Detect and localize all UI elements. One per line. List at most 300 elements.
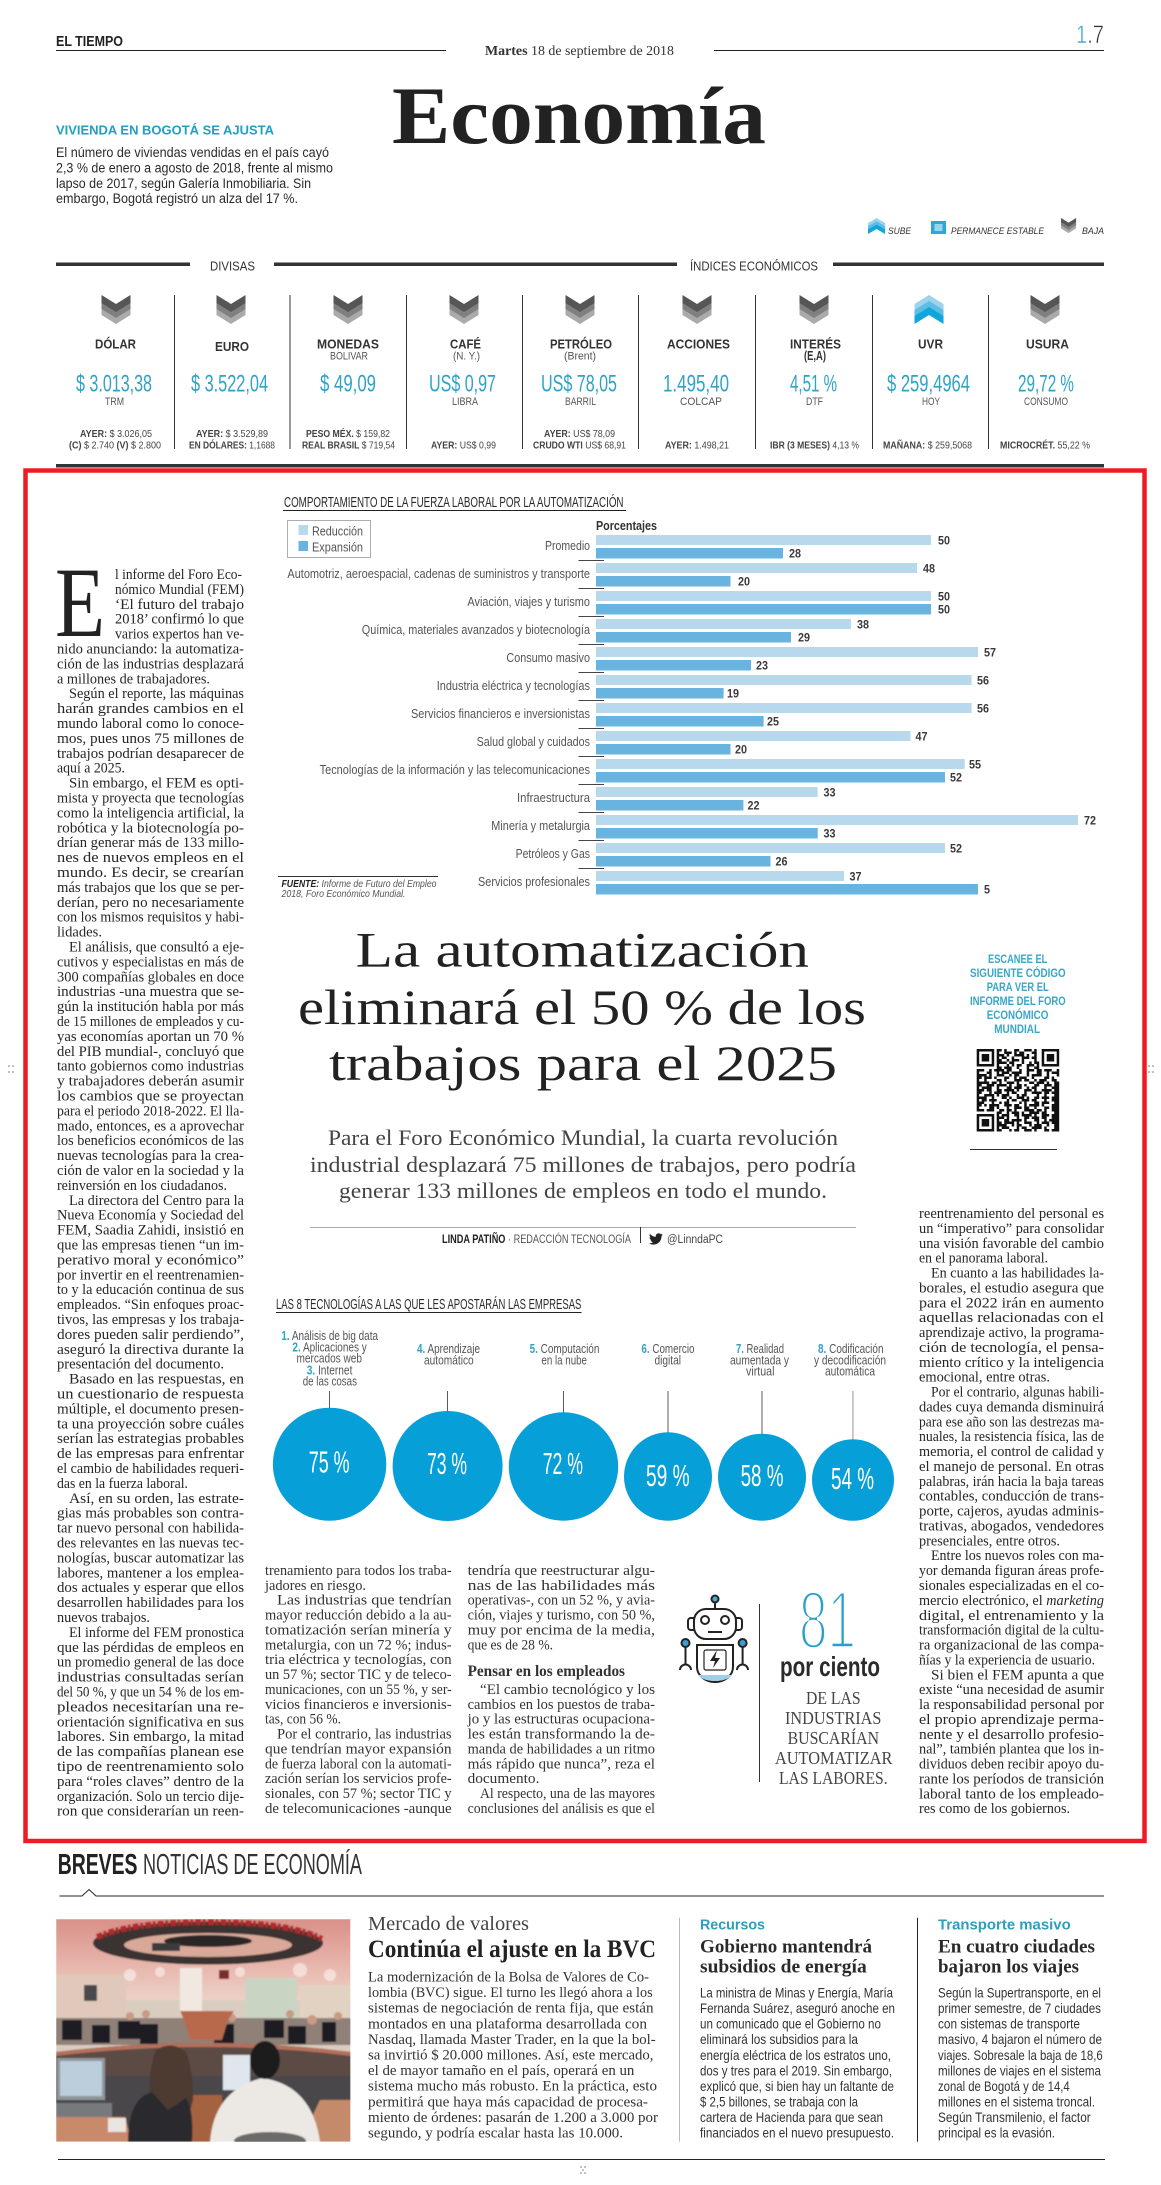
QR caption: INFORME DEL FORO <box>970 994 1066 1008</box>
bubble 75 %: 3. Internet <box>307 1362 353 1378</box>
article column right: yor demanda figuran áreas profe- <box>919 1563 1104 1579</box>
article column 2: zación serían los servicios profe- <box>265 1771 452 1787</box>
row: promedio: 28 <box>789 548 802 560</box>
article column 1: derían, pero no necesariamente <box>57 895 244 911</box>
article column 1: ron que considerarían un reen- <box>57 1804 244 1820</box>
axis unit: Porcentajes <box>596 519 657 533</box>
indicator: euro: AYER: $ 3.529,89 <box>196 428 268 440</box>
subheading: Para el Foro Económico Mundial, la cuarta revolución <box>328 1125 838 1150</box>
row: consumo masivo: 23 <box>756 660 768 672</box>
indicator: interés: IBR (3 MESES) 4,13 % <box>770 440 859 452</box>
article column right: Si bien el FEM apunta a que <box>931 1667 1104 1683</box>
article column 1: l informe del Foro Eco- <box>115 567 242 583</box>
article column right: emocional, entre otras. <box>919 1370 1050 1386</box>
brief: recursos: financiados en el nuevo presupuesto. <box>700 2125 894 2141</box>
bubble 75 %: de las cosas <box>303 1374 357 1388</box>
brief: recursos: Recursos <box>700 1916 765 1933</box>
article column right: presenciales, entre otros. <box>919 1533 1060 1549</box>
row: servicios financieros: 25 <box>767 716 780 728</box>
row: aviación <box>467 591 950 616</box>
article column 1: to y la educación continua de sus <box>57 1282 244 1298</box>
article column right: la responsabilidad personal por <box>919 1697 1104 1713</box>
article column 1: Así, en su orden, las estrate- <box>69 1491 244 1507</box>
article column 2: que tendrían mayor expansión <box>265 1741 452 1757</box>
article column right: laboral tanto de los empleado- <box>919 1786 1104 1802</box>
row: promedio: Promedio <box>545 538 590 553</box>
article column 1: de las compañías planean ese <box>57 1744 244 1760</box>
article column 3: Al respecto, una de las mayores <box>480 1786 655 1802</box>
article column 1: de las empresas para enfrentar <box>57 1446 244 1462</box>
chart title: COMPORTAMIENTO DE LA FUERZA LABORAL POR LA AUTOMATIZACIÓN <box>284 494 624 511</box>
bubble 58 %: aumentada y <box>730 1352 789 1368</box>
article column 3: cambios en los puestos de traba- <box>468 1697 655 1713</box>
bubble 72 %: 72 % <box>543 1446 583 1481</box>
article column 2: tomatización serían minería y <box>265 1622 452 1638</box>
icon: permanece estable <box>931 221 946 234</box>
chart source <box>278 876 438 900</box>
brief: transporte masivo: millones en el sistema troncal. <box>938 2094 1095 2110</box>
row: minería: 33 <box>824 828 836 840</box>
article column 1: Basado en las respuestas, en <box>69 1372 245 1388</box>
headline <box>298 922 866 1091</box>
indicator: interés: INTERÉS <box>790 336 841 352</box>
indicator: dólar: (C) $ 2.740 (V) $ 2.800 <box>69 440 161 452</box>
article column 1: que las empresas tienen “un im- <box>57 1238 244 1254</box>
article column 1: El análisis, que consultó a eje- <box>69 940 244 956</box>
brief: mercado de valores: miento de órdenes: pasarán de 1.200 a 3.000 por <box>368 2110 658 2126</box>
indicator: euro: EURO <box>215 339 249 354</box>
article column 1: nido anunciando: la automatiza- <box>57 642 244 658</box>
article column 1: tipo de reentrenamiento solo <box>57 1759 244 1775</box>
callout text: DE LAS <box>806 1688 861 1708</box>
article column 2: un 57 %; sector TIC y de teleco- <box>265 1667 452 1683</box>
article column 1 <box>55 547 245 1820</box>
indicator: euro <box>189 295 275 452</box>
desk and papers <box>185 2095 222 2142</box>
article column 2: Por el contrario, las industrias <box>277 1727 452 1743</box>
date: Martes 18 de septiembre de 2018 <box>485 44 674 59</box>
brief: transporte masivo: principal es la evasión. <box>938 2125 1055 2141</box>
brief: recursos: La ministra de Minas y Energía, María <box>700 1984 893 2000</box>
QR callout <box>970 952 1066 1150</box>
article column 1: serían las estrategias probables <box>57 1431 244 1447</box>
article column right: Por el contrario, algunas habili- <box>931 1385 1104 1401</box>
article column right: en el panorama laboral. <box>919 1251 1048 1267</box>
article column 1: empleados. “Sin enfoques proac- <box>57 1297 244 1313</box>
bubble 59 %: 59 % <box>646 1458 690 1493</box>
newspaper name: EL TIEMPO <box>56 33 123 50</box>
brief text <box>56 145 333 206</box>
bubble 54 %: automática <box>825 1364 876 1378</box>
indicator: petróleo: PETRÓLEO <box>550 336 612 352</box>
page number: 1.7 <box>1076 21 1104 49</box>
article column 1: para “roles claves” dentro de la <box>57 1774 244 1790</box>
bubble 58 %: virtual <box>746 1364 775 1378</box>
legend label baja: BAJA <box>1082 226 1104 236</box>
row: infraestructura <box>517 787 836 812</box>
bubble 75 %: 2. Aplicaciones y <box>292 1340 367 1354</box>
row: salud <box>477 731 928 756</box>
article column 1: nes de nuevos empleos en el <box>57 850 244 866</box>
row: química <box>362 619 870 644</box>
callout text: AUTOMATIZAR <box>775 1748 892 1768</box>
brief: recursos: explicó que, si bien hay un faltante de <box>700 2078 894 2094</box>
article column 3: manda de habilidades a un ritmo <box>468 1741 655 1757</box>
article column 3: operativas-, con un 52 %, y avia- <box>468 1593 655 1609</box>
brief: recursos: Gobierno mantendrá <box>700 1937 872 1958</box>
bubble 58 % <box>718 1341 806 1521</box>
headline: La automatización <box>356 922 809 978</box>
brief: transporte masivo <box>938 1916 1103 2141</box>
red highlight frame <box>26 470 1144 1841</box>
headline: eliminará el 50 % de los <box>298 979 866 1035</box>
row: petróleos: Petróleos y Gas <box>516 846 590 861</box>
article column 1: un cuestionario de respuesta <box>57 1386 244 1402</box>
subheading: pensar en los empleados: Pensar en los empleados <box>468 1663 625 1680</box>
brief: mercado de valores: La modernización de la Bolsa de Valores de Co- <box>368 1970 649 1986</box>
article column 1: ción de las industrias desplazará <box>57 656 244 672</box>
masthead <box>56 21 1104 59</box>
bubble 73 %: 73 % <box>427 1446 467 1481</box>
brief text: 2,3 % de enero a agosto de 2018, frente al mismo <box>56 160 333 176</box>
article column 3: conclusiones del análisis es que el <box>468 1801 655 1817</box>
brief: recursos <box>700 1916 895 2141</box>
bubble 73 %: 4. Aprendizaje <box>417 1341 480 1356</box>
brief: transporte masivo: Según Transmilenio, el factor <box>938 2109 1091 2125</box>
row: servicios profesionales: 37 <box>850 872 862 884</box>
row: tecnologías: Tecnologías de la información y las telecomunicaciones <box>320 762 590 777</box>
article column right: contables, conducción de trans- <box>919 1489 1104 1505</box>
article column right: aquellas relacionadas con el <box>919 1310 1104 1326</box>
ceiling ring <box>93 1922 323 1964</box>
brief: mercado de valores: montados en una plataforma desarrollada con <box>368 2016 648 2032</box>
article column 1: como la inteligencia artificial, la <box>57 805 244 821</box>
article column 1: ‘El futuro del trabajo <box>115 597 244 613</box>
heading: divisas: DIVISAS <box>210 258 255 274</box>
indicator: uvr: HOY <box>922 396 940 408</box>
article column 1: cutivos y especialistas en más de <box>57 954 244 970</box>
subheading <box>310 1125 856 1203</box>
breves header: NOTICIAS DE ECONOMÍA <box>143 1848 362 1881</box>
article column 1: gún la institución habla por más <box>57 999 244 1015</box>
callout text <box>775 1688 892 1788</box>
article column 1: Sin embargo, el FEM es opti- <box>69 776 244 792</box>
article column 2 <box>264 1563 452 1817</box>
bubble 54 %: 8. Codificación <box>818 1341 884 1356</box>
article column 3 <box>467 1563 655 1817</box>
chart legend <box>288 520 370 558</box>
row: promedio <box>545 535 950 560</box>
indicator: petróleo: BARRIL <box>565 396 596 408</box>
row: industria eléctrica: Industria eléctrica y tecnologías <box>437 678 590 693</box>
article column right: rante los períodos de transición <box>919 1771 1104 1787</box>
por ciento: por ciento <box>780 1651 880 1682</box>
row: consumo masivo: Consumo masivo <box>506 650 590 665</box>
brief: mercado de valores: Continúa el ajuste en la BVC <box>368 1936 656 1963</box>
row: consumo masivo: 57 <box>984 648 996 660</box>
callout text: BUSCARÍAN <box>788 1727 879 1748</box>
row: automotriz: 20 <box>738 576 750 588</box>
article column 1: robótica y la biotecnología po- <box>57 820 244 836</box>
row: aviación: 50 <box>938 604 950 616</box>
article column 2: mayor reducción debido a la au- <box>265 1608 452 1624</box>
row: infraestructura: 22 <box>748 800 760 812</box>
article column 1: más trabajos que los que se per- <box>57 880 244 896</box>
subheading: generar 133 millones de empleos en todo el mundo. <box>339 1178 827 1203</box>
bubble 73 %: automático <box>424 1352 474 1368</box>
brief text: embargo, Bogotá registró un alza del 17 %. <box>56 191 298 206</box>
article column 2: Las industrias que tendrían <box>277 1593 452 1609</box>
podium <box>180 2011 234 2040</box>
article column 1: desarrollen habilidades para los <box>57 1595 244 1611</box>
brief: transporte masivo: primer semestre, de 7 ciudades <box>938 2000 1101 2016</box>
indicator: uvr <box>883 295 972 452</box>
indicator: petróleo: (Brent) <box>564 350 596 362</box>
article column right: digital, el entrenamiento y la <box>919 1608 1104 1624</box>
row: minería: 72 <box>1084 816 1096 828</box>
article column right: una visión favorable del cambio <box>919 1236 1104 1252</box>
brief: transporte masivo: Transporte masivo <box>938 1916 1071 1933</box>
bubble 75 %: 1. Análisis de big data <box>281 1328 379 1343</box>
woman seated <box>150 2045 193 2118</box>
row: promedio: 50 <box>938 536 950 548</box>
row: petróleos: 52 <box>950 844 962 856</box>
icon: sube <box>868 218 885 234</box>
indicator: monedas: PESO MÉX. $ 159,82 <box>306 427 390 440</box>
article column 1: das en la fuerza laboral. <box>57 1476 188 1492</box>
foreground monitor and keyboard <box>57 2058 105 2100</box>
row: industria eléctrica <box>437 675 989 700</box>
row: infraestructura: 33 <box>824 788 836 800</box>
article column 1: con los mismos requisitos y habi- <box>57 910 244 926</box>
row: servicios profesionales: 5 <box>984 884 991 896</box>
byline <box>310 1227 856 1246</box>
breves header <box>58 1848 1104 1896</box>
bubble chart title: LAS 8 TECNOLOGÍAS A LAS QUE LES APOSTARÁN LAS EMPRESAS <box>276 1296 581 1313</box>
article column 3: tendría que reestructurar algu- <box>468 1563 655 1579</box>
article column 1: des relevantes en las nuevas tec- <box>57 1536 244 1552</box>
QR caption: MUNDIAL <box>994 1022 1040 1036</box>
indicator: petróleo <box>533 295 626 452</box>
indicator: interés: 4,51 % <box>790 371 837 398</box>
indicator: acciones: COLCAP <box>680 396 722 408</box>
row: infraestructura: Infraestructura <box>517 790 591 805</box>
row: servicios profesionales: Servicios profesionales <box>478 874 590 889</box>
article column 1: del PIB mundial-, concluyó que <box>57 1044 244 1060</box>
row: minería <box>491 815 1096 840</box>
article column 2: trenamiento para todos los traba- <box>265 1563 452 1579</box>
article column 1: El informe del FEM pronostica <box>69 1625 244 1641</box>
article column right: transformación digital de la cultu- <box>919 1623 1104 1639</box>
indicator: acciones <box>663 295 730 452</box>
article column right: existe “una necesidad de asumir <box>919 1682 1104 1698</box>
article column right: nuales, la resistencia física, las de <box>919 1429 1104 1445</box>
row: automotriz <box>287 563 936 588</box>
indicator: acciones: ACCIONES <box>667 336 730 352</box>
section title: Economía <box>392 70 766 161</box>
row: tecnologías: 55 <box>969 760 982 772</box>
brief: recursos: cartera de Hacienda para que sean <box>700 2109 883 2125</box>
bubble 72 % <box>509 1341 618 1521</box>
big number: 81 <box>799 1575 856 1666</box>
article column 1: mundo laboral como lo conoce- <box>57 716 244 732</box>
indicator: interés: (E,A) <box>804 348 826 363</box>
brief: recursos: eliminará los subsidios para la <box>700 2031 858 2047</box>
article column 1: Según el reporte, las máquinas <box>69 686 244 702</box>
brief: mercado de valores: Nasdaq, llamada Master Trader, en la que la bol- <box>368 2032 656 2048</box>
article column 1: labores, mantener a los emplea- <box>57 1565 244 1581</box>
article column right: aprendizaje activo, la programa- <box>919 1325 1104 1341</box>
article column right: el propio aprendizaje perma- <box>919 1712 1104 1728</box>
article column 1: aseguró la directiva durante la <box>57 1342 244 1358</box>
article column 1: yas economías aportan un 70 % <box>57 1029 244 1045</box>
indicator: petróleo: US$ 78,05 <box>541 371 617 398</box>
article column right: para ese año son las destrezas ma- <box>919 1414 1104 1430</box>
QR caption: PARA VER EL <box>987 980 1049 994</box>
brief: mercado de valores: el de mayor tamaño en el país, operará en un <box>368 2063 635 2079</box>
indicator: café: LIBRA <box>452 396 479 408</box>
indicator: uvr: $ 259,4964 <box>887 371 970 398</box>
chart legend: Reducción <box>312 524 363 538</box>
row: aviación: 50 <box>938 592 950 604</box>
article column right: ción de tecnología, el pensa- <box>919 1340 1104 1356</box>
brief: recursos: un comunicado que el Gobierno no <box>700 2016 881 2032</box>
article column 1: tar nuevo personal con habilida- <box>57 1521 244 1537</box>
article column right: dades cuya demanda disminuirá <box>919 1399 1104 1415</box>
article column 1: gias más probables son contra- <box>57 1506 244 1522</box>
article column 1: un promedio general de las doce <box>57 1655 244 1671</box>
row: automotriz: 48 <box>923 564 936 576</box>
laptop <box>223 2055 250 2090</box>
bubble 75 % <box>273 1328 386 1521</box>
article column 1: dos actuales y esperar que ellos <box>57 1580 244 1596</box>
article column 1: tivos, las empresas y los trabaja- <box>57 1312 244 1328</box>
article column 1: organización. Solo un tercio dije- <box>57 1789 244 1805</box>
chart source: FUENTE: Informe de Futuro del Empleo <box>282 879 437 890</box>
brief text: lapso de 2017, según Galería Inmobiliaria. Sin <box>56 176 311 191</box>
article column right: reentrenamiento del personal es <box>919 1206 1104 1222</box>
row: salud: Salud global y cuidados <box>477 734 590 749</box>
article column 1: para el periodo 2018-2022. El lla- <box>57 1103 244 1119</box>
indicator: café: CAFÉ <box>450 336 481 352</box>
article column 2: municaciones, con un 55 %, y ser- <box>265 1682 452 1698</box>
chart source: 2018, Foro Económico Mundial. <box>281 889 406 900</box>
article column right: trativas, abogados, vendedores <box>919 1518 1104 1534</box>
bubble 59 %: 6. Comercio <box>641 1341 695 1356</box>
indicator: usura: CONSUMO <box>1024 396 1068 408</box>
article column 1: nómico Mundial (FEM) <box>115 582 244 598</box>
row: aviación: Aviación, viajes y turismo <box>467 594 590 609</box>
article column 1: labores. Sin embargo, la mitad <box>57 1729 244 1745</box>
indicator: interés: DTF <box>806 396 823 408</box>
article column 1: perativo moral y económico” <box>57 1252 244 1268</box>
brief: mercado de valores: segundo, y podría escalar hasta las 10.000. <box>368 2126 623 2142</box>
brief: transporte masivo: bajaron los viajes <box>938 1957 1079 1978</box>
brief: recursos: $ 2,5 billones, se trabaja con la <box>700 2094 858 2110</box>
row: consumo masivo <box>506 647 996 672</box>
indicator: usura: USURA <box>1026 336 1070 352</box>
icon: twitter bird <box>649 1233 663 1245</box>
article column 2: sionales, con 57 %; sector TIC y <box>265 1786 452 1802</box>
row: petróleos: 26 <box>776 856 788 868</box>
article column 1: drían generar más de 133 millo- <box>57 835 244 851</box>
row: industria eléctrica: 56 <box>977 676 989 688</box>
article column 3: muy por encima de la media, <box>468 1622 655 1638</box>
article column right: borales, el estudio asegura que <box>919 1280 1104 1296</box>
indicator: petróleo: CRUDO WTI US$ 68,91 <box>533 440 626 452</box>
article column 2: vicios financieros e inversionis- <box>265 1697 452 1713</box>
indicator: usura: MICROCRÉT. 55,22 % <box>1000 438 1090 452</box>
indicator: acciones: AYER: 1.498,21 <box>665 440 729 452</box>
bubble chart: tecnologías <box>273 1296 894 1521</box>
row: salud: 20 <box>735 744 747 756</box>
chart legend: Expansión <box>312 540 363 554</box>
article column right: el manejo de personal. En otras <box>919 1459 1104 1475</box>
article column 1: 2018’ confirmó lo que <box>115 612 244 628</box>
article column 3: “El cambio tecnológico y los <box>480 1682 655 1698</box>
brief: mercado de valores: permitirá que haya más capacidad de procesa- <box>368 2094 648 2110</box>
article column right <box>919 1206 1104 1817</box>
brief: transporte masivo: Según la Supertransporte, en el <box>938 1984 1101 2000</box>
article column 1: industrias -una muestra que se- <box>57 984 244 1000</box>
icon: baja <box>1061 218 1076 233</box>
mid desk band <box>56 2044 350 2077</box>
bubble 59 %: digital <box>654 1352 681 1368</box>
article column right: dividuos deben recibir apoyo du- <box>919 1757 1104 1773</box>
indicator: usura: 29,72 % <box>1018 371 1074 398</box>
QR caption: SIGUIENTE CÓDIGO <box>970 965 1066 980</box>
legend label sube: SUBE <box>888 226 912 236</box>
QR caption: ESCANEE EL <box>988 952 1047 966</box>
article column right: res como de los gobiernos. <box>919 1801 1070 1817</box>
indicator: monedas: MONEDAS <box>317 336 379 352</box>
article column right: ra organizacional de las compa- <box>919 1638 1104 1654</box>
article column right: nente y el desarrollo profesio- <box>919 1727 1104 1743</box>
legend label estable: PERMANECE ESTABLE <box>951 226 1045 236</box>
indicator: acciones: 1.495,40 <box>663 371 729 398</box>
callout: 81 por ciento <box>759 1575 892 1788</box>
subheading: industrial desplazará 75 millones de trabajos, pero podría <box>310 1152 856 1177</box>
bubble 58 %: 7. Realidad <box>736 1341 784 1356</box>
indicator: uvr: MAÑANA: $ 259,5068 <box>883 438 972 452</box>
row: industria eléctrica: 19 <box>727 688 739 700</box>
panel: indicators <box>56 258 1104 468</box>
bubble 59 % <box>624 1341 712 1521</box>
indicator: dólar: DÓLAR <box>95 336 137 352</box>
article column 1: lidades. <box>57 925 102 941</box>
QR caption: ECONÓMICO <box>987 1007 1048 1022</box>
article column right: palabras, irán hacia la baja tareas <box>919 1474 1104 1490</box>
row: salud: 47 <box>916 732 928 744</box>
brief: transporte masivo: zonal de Bogotá y de 14,4 <box>938 2078 1070 2094</box>
indicator: café <box>429 295 496 452</box>
indicator: monedas: REAL BRASIL $ 719,54 <box>302 440 395 452</box>
article column 2: de telecomunicaciones -aunque <box>265 1801 452 1817</box>
row: servicios financieros: Servicios financieros e inversionistas <box>411 706 590 721</box>
indicator: dólar: TRM <box>105 396 124 408</box>
row: tecnologías: 52 <box>950 772 962 784</box>
indicator: café: AYER: US$ 0,99 <box>431 440 496 452</box>
indicator: petróleo: AYER: US$ 78,09 <box>544 428 615 440</box>
article column right: un “imperativo” para consolidar <box>919 1221 1104 1237</box>
article column 1: de 15 millones de empleados y cu- <box>57 1014 244 1030</box>
article column 1: nuevos trabajos. <box>57 1610 150 1626</box>
article column 1: FEM, Saadia Zahidi, insistió en <box>57 1223 244 1239</box>
article column 1: a millones de trabajadores. <box>57 671 210 687</box>
indicator: café: US$ 0,97 <box>429 371 496 398</box>
article column 3: jo y las estructuras ocupaciona- <box>467 1712 655 1728</box>
row: química: 38 <box>857 620 870 632</box>
